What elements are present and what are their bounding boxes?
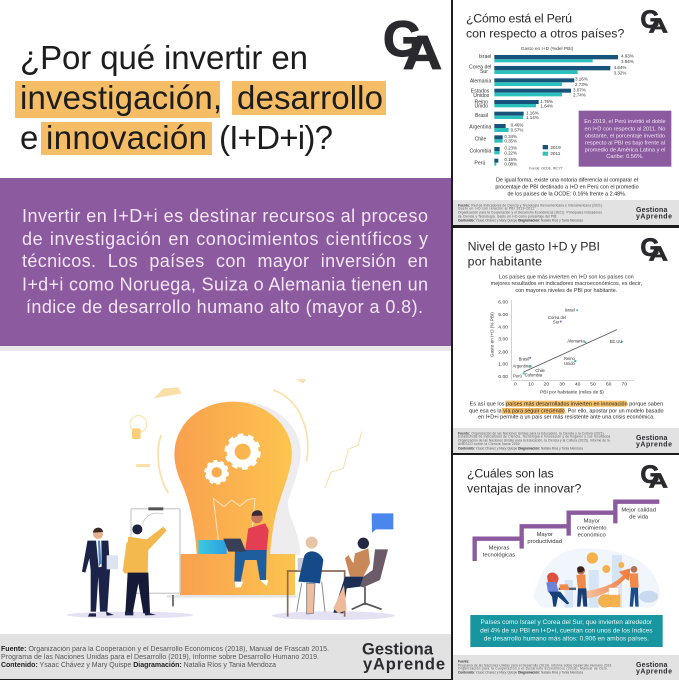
text block: intro — [491, 274, 642, 294]
scatter chart: EE.UU — [610, 339, 622, 344]
footer: UNESCO sobre la Ciencia hacia 2030 — [458, 442, 520, 446]
footer — [453, 428, 679, 453]
heading — [468, 239, 600, 268]
icon: GA logo: G — [640, 235, 660, 262]
footer: Contenido: Ysaac Chávez y Mary Quispe Diagramación: Natalia Ríos y Tania Mendoza — [458, 670, 583, 674]
legend — [543, 145, 561, 156]
bar chart: 1.76% — [540, 99, 553, 104]
legend: 2019 — [550, 145, 561, 150]
icon: GA logo — [640, 235, 668, 266]
scatter chart: Israel — [565, 307, 575, 312]
scatter chart: Gasto en I+D (% PBI) — [489, 312, 494, 357]
bar chart: 2.73% — [575, 82, 588, 87]
bar chart: Unidos — [473, 93, 490, 99]
heading: con respecto a otros países? — [466, 26, 624, 40]
scatter chart: 0 — [514, 381, 517, 387]
bar chart: Corea del — [469, 65, 491, 71]
footer: Fuente: Red de Indicadores de Ciencia y Tecnología Iberoamericana e Interamericana (2021). — [458, 203, 603, 207]
footer: Organización para la Cooperación y el Desarrollo Económicos (2021). Principales indicadores — [458, 210, 602, 214]
scatter chart: 5.00 — [498, 312, 508, 318]
text block: OCDE comparison: de los países de la OCDE: 0.16% frente a 2.48%. — [507, 192, 627, 198]
bar chart: 0.35% — [504, 139, 517, 144]
callout: purple note: Caribe: 0.56%. — [606, 154, 644, 160]
scatter chart: Argentina — [513, 364, 531, 369]
scatter chart: 30 — [559, 381, 565, 387]
title: innovación — [46, 119, 207, 156]
footer: Gestiona — [636, 207, 667, 214]
text block: highlighted conclusion: Es así que los países más desarrollados invierten en innovación porque saben — [470, 402, 663, 408]
bar chart: 0.22% — [504, 150, 517, 155]
text block: OCDE comparison: De igual forma, existe una notoria diferencia al comparar el — [496, 178, 638, 184]
stairs diagram: Mejor calidad — [621, 507, 656, 513]
heading: ventajas de innovar? — [467, 481, 581, 495]
stairs diagram: productividad — [527, 539, 562, 545]
footer: Fuente: — [458, 660, 469, 664]
panel: purple intro text: Invertir en I+D+i es destinar recursos al proceso — [22, 206, 428, 226]
title: e — [20, 119, 38, 156]
scatter chart: Perú — [513, 374, 522, 379]
heading: ¿Cuáles son las — [467, 466, 554, 480]
footer: Contenido: Ysaac Chávez y Mary Quispe Diagramación: Natalia Ríos y Tania Mendoza — [458, 447, 583, 451]
text block: intro: con mayores niveles de PBI por habitante. — [515, 288, 618, 294]
man in suit — [82, 528, 118, 617]
title: (I+D+i)? — [219, 119, 333, 156]
footer: Organización para la Cooperación y el Desarrollo Económicos (2018). Manual de Oslo. — [458, 667, 608, 671]
bar chart — [469, 46, 634, 170]
scatter chart: 70 — [622, 381, 627, 387]
bar chart: 0.08% — [504, 162, 517, 167]
bar chart: 0.34% — [504, 134, 517, 139]
footer: sources: Fuente: Organización para la Cooperación y el Desarrollo Económicos (2018), Manual de Frascati 2015. — [1, 646, 329, 653]
panel: purple intro text — [0, 178, 451, 351]
footer: Fuente: Organización de las Naciones Unidas para la Educación, la Ciencia y la Cultura (2021). — [458, 431, 605, 435]
bar chart: Fuente: OCDE, RICYT — [529, 166, 563, 170]
decorative sparks — [130, 390, 362, 493]
person with laptop — [223, 510, 269, 587]
footer wordmark: Gestiona — [362, 640, 434, 658]
text block: OCDE comparison — [495, 178, 639, 198]
title: desarrollo — [237, 79, 383, 116]
bar chart: Reino — [475, 99, 488, 105]
callout: purple note: respecto al PBI es bajo frente al — [585, 140, 665, 146]
footer: Programa de las Naciones Unidas para el Desarrollo (2019). Informe sobre Desarrollo Humano 2019. — [458, 663, 612, 667]
scatter chart: Brasil — [519, 357, 529, 362]
bar chart: 1.16% — [526, 110, 539, 115]
callout: teal note: del 4% de su PBI en I+D+i, cuentan con unos de los índices — [480, 627, 653, 634]
bar chart: 1.64% — [540, 104, 553, 109]
callout: teal note: Países como Israel y Corea del Sur, que invierten alrededor — [481, 619, 653, 626]
callout: purple note — [579, 111, 671, 167]
footer wordmark — [362, 640, 445, 674]
meeting table with woman and man — [288, 513, 393, 617]
stairs diagram: Mayor — [584, 518, 600, 524]
bar chart: 2.74% — [573, 93, 586, 98]
scatter chart: 2.00 — [498, 349, 508, 355]
text block: intro: Los países que más invierten en I+D son los países con — [499, 274, 634, 280]
icon: GA logo: A — [649, 244, 668, 266]
footer: yAprende — [636, 213, 672, 220]
heading — [466, 11, 624, 40]
floor shadows — [67, 611, 395, 620]
scatter chart: 1.00 — [498, 362, 508, 368]
scatter chart: 3.00 — [498, 337, 508, 343]
scatter chart: Colombia — [525, 372, 543, 377]
stairs diagram: económico — [578, 532, 606, 538]
callout: teal note: de desarrollo humano más altos: 0,906 en ambos países. — [484, 635, 649, 642]
icon: GA logo — [640, 462, 668, 493]
illustration: team and growth arrow — [534, 548, 660, 608]
bar chart: 0.46% — [511, 123, 523, 128]
panel: comparison with other countries — [453, 7, 679, 225]
scatter chart: Chile — [535, 368, 545, 373]
whiteboard — [131, 507, 180, 606]
text block: highlighted conclusion: que esa es la vía para seguir creciendo. Por ello, apostar por un modelo basado — [469, 409, 663, 415]
scatter chart: Sur — [553, 319, 560, 324]
icon: GA logo: A — [403, 26, 442, 79]
scatter chart: 50 — [590, 381, 596, 387]
callout: purple note: en I+D con respecto al 2011. No — [585, 126, 665, 132]
footer: sources: Programa de las Naciones Unidas para el Desarrollo (2019), Informe sobre Desarrollo Humano 2019. — [1, 654, 319, 661]
stairs diagram: de vida — [629, 514, 649, 520]
scatter chart: 60 — [606, 381, 612, 387]
scatter chart: Corea del — [548, 315, 566, 320]
icon: bulb — [174, 402, 301, 555]
footer: Gestiona — [636, 435, 667, 442]
text block: intro: mejores resultados en indicadores macroeconómicos, es decir, — [491, 281, 642, 287]
bar chart: 1.14% — [526, 115, 539, 120]
bar chart: Gasto en I+D (%del PBI) — [521, 46, 574, 52]
footer: sources: Contenido: Ysaac Chávez y Mary Quispe Diagramación: Natalia Ríos y Tania Mendoza — [1, 662, 276, 669]
icon: GA logo: G — [640, 7, 660, 34]
footer: Gasto en I+D con relación al PBI 2019-2011 — [458, 207, 534, 211]
stairs diagram: crecimiento — [577, 525, 607, 531]
scatter chart: Unido — [564, 361, 576, 366]
panel: main left infographic — [0, 11, 451, 679]
bar chart: Israel — [479, 54, 491, 60]
title: investigación, — [20, 79, 222, 116]
stairs diagram: tecnológicas — [483, 552, 515, 558]
bar chart: 3.16% — [575, 76, 588, 81]
callout: purple note: obstante, el porcentaje invertido — [585, 133, 665, 139]
footer: Estadísticas de indicadores de Ciencia, Tecnología e Innovación y de hogares y sus resultados. — [458, 435, 611, 439]
bar chart: Argentina — [469, 125, 491, 131]
callout: purple note: En 2019, el Perú invirtió el doble — [584, 119, 666, 125]
icon: GA logo: G — [640, 462, 660, 489]
bar chart: 4.93% — [621, 53, 634, 58]
yellow platform — [167, 540, 297, 598]
bar chart: Sur — [480, 69, 488, 75]
footer: sources — [0, 634, 451, 679]
scatter chart: 6.00 — [498, 300, 508, 306]
footer wordmark: yAprende — [363, 656, 445, 674]
panel: advantages of innovating — [453, 462, 679, 680]
bar chart: Brasil — [475, 113, 488, 119]
footer: Contenido: Ysaac Chávez y Mary Quispe Diagramación: Natalia Ríos y Tania Mendoza — [458, 219, 583, 223]
bar chart: 3.94% — [621, 59, 634, 64]
footer: yAprende — [636, 668, 672, 675]
panel: purple intro text: I+d+i como Noruega, Suiza o Alemania tienen un — [22, 274, 428, 294]
bar chart: 0.23% — [504, 146, 517, 151]
bar chart: Perú — [474, 161, 485, 167]
text block: OCDE comparison: procentaje de PBI destinado a I+D en Perú con el promedio — [495, 185, 639, 191]
panel: purple intro text: técnicos. Los países con mayor inversión en — [22, 251, 428, 271]
scatter chart — [489, 300, 634, 395]
scatter chart: Reino — [564, 356, 576, 361]
icon: GA logo: A — [649, 471, 668, 493]
bar chart: 0.57% — [511, 127, 523, 132]
bar chart: 0.16% — [504, 157, 517, 162]
scatter chart: 4.00 — [498, 324, 508, 330]
stairs diagram: Mayor — [537, 532, 553, 538]
illustration: light bulb and team — [67, 379, 395, 620]
callout: purple note: promedio de América Latina y el — [585, 147, 665, 153]
footer: Organización de las Naciones Unidas para la Educación, la Ciencia y la Cultura (2015). Informe de la — [458, 438, 610, 442]
bar chart: Alemania — [470, 79, 491, 85]
footer: de Ciencia y Tecnología. Gasto en I+D como porcentaje del PIB. — [458, 214, 557, 218]
panel: purple intro text: índice de desarrollo humano alto (mayor a 0.8). — [26, 297, 423, 317]
icon: GA logo — [383, 11, 442, 79]
icon: GA logo: G — [383, 11, 422, 67]
title — [15, 39, 386, 156]
panel: purple intro text: de investigación en conocimientos científicos y — [22, 229, 428, 249]
icon: GA logo — [640, 7, 668, 38]
scatter chart: 10 — [528, 381, 534, 387]
panel: spending and GDP per capita — [453, 235, 679, 453]
icon: GA logo: A — [649, 16, 668, 38]
heading — [467, 466, 581, 495]
scatter chart: Alemania — [567, 339, 585, 344]
footer: Gestiona — [636, 662, 667, 669]
callout: teal note — [470, 615, 663, 647]
bar chart: 3.07% — [573, 87, 586, 92]
bar chart: 4.64% — [614, 65, 626, 70]
text block: highlighted conclusion: en I+D+i permite a un país ser más resistente ante una crisis económica. — [478, 415, 655, 421]
bar chart: Chile — [475, 137, 486, 143]
heading: por habitante — [468, 254, 542, 268]
scatter chart: 20 — [544, 381, 549, 387]
stairs diagram — [475, 502, 659, 561]
heading: ¿Cómo está el Perú — [466, 11, 572, 25]
bar chart: Colombia — [470, 149, 491, 155]
footer — [453, 200, 679, 225]
footer: yAprende — [636, 441, 672, 448]
bar chart: Unido — [475, 104, 488, 110]
bar chart: 3.32% — [614, 71, 626, 76]
heading: Nivel de gasto I+D y PBI — [468, 239, 600, 253]
footer — [453, 655, 679, 680]
legend: 2011 — [550, 151, 561, 156]
stairs diagram: Mejoras — [489, 545, 509, 551]
title: ¿Por qué invertir en — [20, 39, 308, 76]
man in yellow sweater — [123, 524, 167, 615]
bar chart: Estados — [471, 89, 490, 95]
scatter chart: 0.00 — [498, 374, 508, 380]
text block: highlighted conclusion — [469, 401, 663, 421]
scatter chart: 40 — [575, 381, 581, 387]
scatter chart: PBI por habitante (miles de $) — [540, 389, 604, 395]
